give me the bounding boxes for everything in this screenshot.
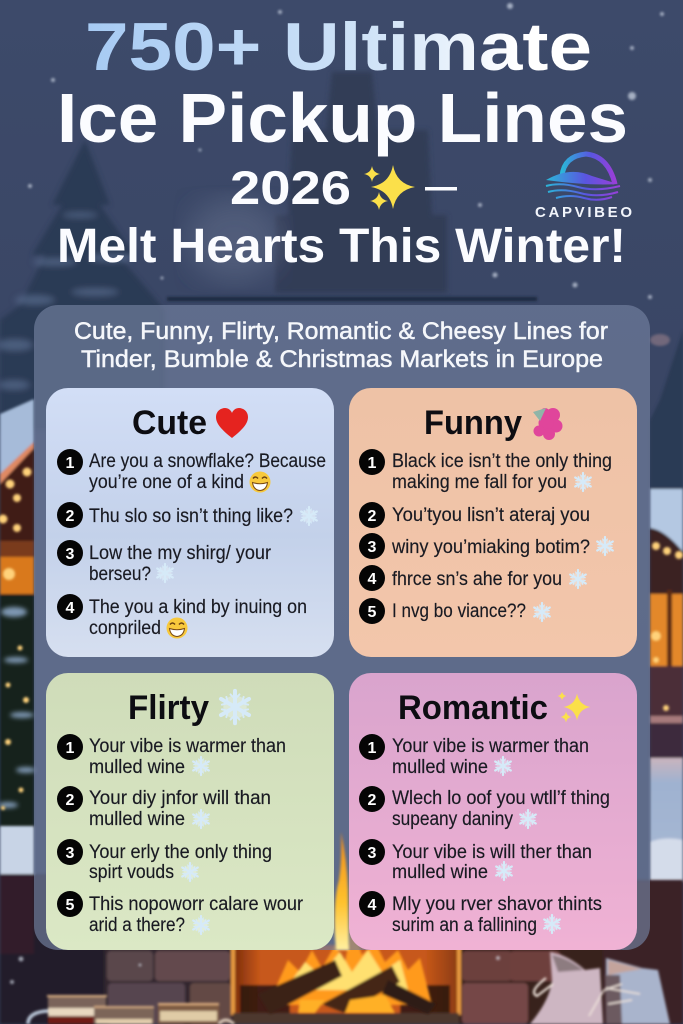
church tower silhouette [275,72,447,293]
right pine trees [650,330,683,490]
item 3 [359,839,592,883]
heading: Funny: Funny [424,404,522,442]
item 2: Thu slo so isn’t thing like? [89,506,293,527]
icon: sparkles [364,165,415,210]
heading: Flirty: Flirty [128,689,209,727]
item 3: Your erly the only thing [89,842,272,863]
item 4 [57,594,307,639]
item 3: 3 [368,539,377,556]
item 5: 5 [66,897,75,914]
cabin and tree lights [0,468,683,810]
panel: Cute card [46,388,334,657]
item 2: 2 [66,792,75,809]
item 2: 2 [368,792,377,809]
item 1 [57,734,286,778]
title: 750+ Ultimate [85,9,592,85]
item 5 [359,598,550,624]
title: 2026 [230,161,351,214]
item 1: 1 [368,455,377,472]
item 1 [359,449,612,493]
left pine tree [0,140,165,430]
item 1: mulled wine [392,757,488,778]
left cabin wall [0,440,34,596]
logo: Capvibeo [535,154,632,221]
subtitle: Tinder, Bumble & Christmas Markets in Europe [81,346,603,373]
panel: Romantic card [349,673,637,950]
item 2: Wlech lo oof you wtll’f thing [392,788,610,809]
item 4: fhrce sn’s ahe for you [392,569,562,590]
heading: Cute: Cute [132,404,207,442]
panel: Funny card [349,388,637,657]
item 1: Are you a snowflake? Because [89,451,326,472]
item 1: 1 [368,740,377,757]
item 1: mulled wine [89,757,185,778]
item 3 [359,533,613,559]
item 5 [57,891,304,936]
left cabin roof snow [0,399,34,474]
item 3: 3 [66,845,75,862]
item 4: surim an a fallining [392,915,537,936]
dark ledge line [167,297,537,301]
right cabin wall and window [650,528,683,720]
item 5: 5 [368,604,377,621]
icon: snowflake [221,691,249,723]
item 1 [359,734,589,778]
item 5: This nopoworr calare wour [89,894,304,915]
item 2 [57,502,317,528]
title [57,9,628,273]
christmas tree [0,594,34,828]
mulled wine mugs [28,995,234,1024]
title: Melt Hearts This Winter! [57,220,626,273]
item 3: 3 [368,845,377,862]
right cabin roof snow [650,489,683,552]
brick wall right [600,880,683,1024]
item 2 [359,502,590,528]
flames rising between cards [335,832,349,950]
item 3: 3 [66,546,75,563]
item 3 [57,839,272,883]
item 4 [359,891,602,936]
item 2: mulled wine [89,809,185,830]
item 1: 1 [66,455,75,472]
item 2: 2 [66,508,75,525]
panel: frosted glass container [34,305,650,950]
left snow bank [0,826,34,874]
logo: Capvibeo: CAPVIBEO [535,204,632,221]
item 4: 4 [368,571,377,588]
item 2 [359,786,610,830]
icon: sparkles [558,692,590,722]
item 3: mulled wine [392,862,488,883]
item 1: Black ice isn’t the only thing [392,451,612,472]
item 4: conpriled [89,618,161,639]
item 4 [359,565,586,591]
item 1 [57,449,326,493]
item 1: making me fall for you [392,472,567,493]
heading: Romantic: Romantic [398,689,548,727]
panel: Flirty card [46,673,334,950]
icon: pink flower [533,408,562,440]
item 4: 4 [368,897,377,914]
item 1: Your vibe is warmer than [89,736,286,757]
item 2: supeany daniny [392,809,513,830]
item 4: The you a kind by inuing on [89,597,307,618]
item 5: I nvg bo viance?? [392,601,526,622]
item 2 [57,786,271,830]
item 4: 4 [66,600,75,617]
misty smoke [187,198,283,282]
item 3: Your vibe is will ther than [392,842,592,863]
brick wall left [0,874,108,1024]
subtitle: Cute, Funny, Flirty, Romantic & Cheesy Lines for [74,318,608,345]
subtitle [74,318,608,373]
icon: red heart [216,408,248,438]
item 2: Your diy jnfor will than [89,788,271,809]
item 1: 1 [66,740,75,757]
item 3: winy you’miaking botim? [391,537,590,558]
item 3: spirt vouds [89,862,174,883]
item 2: You’tyou lisn’t ateraj you [392,505,590,526]
item 1: Your vibe is warmer than [392,736,589,757]
firebox [233,945,459,1013]
item 4: Mly you rver shavor thints [392,894,602,915]
item 3: berseu? [89,564,151,585]
right snow bank [650,758,683,882]
item 1: you’re one of a kind [89,472,244,493]
fireplace stones [104,945,238,1024]
item 3: Low the my shirg/ your [89,543,272,564]
ice skates [530,952,670,1024]
item 5: arid a there? [89,915,185,936]
item 2: 2 [368,508,377,525]
title: Ice Pickup Lines [57,79,628,157]
fire flames and logs [258,925,436,1014]
item 3 [57,540,272,585]
